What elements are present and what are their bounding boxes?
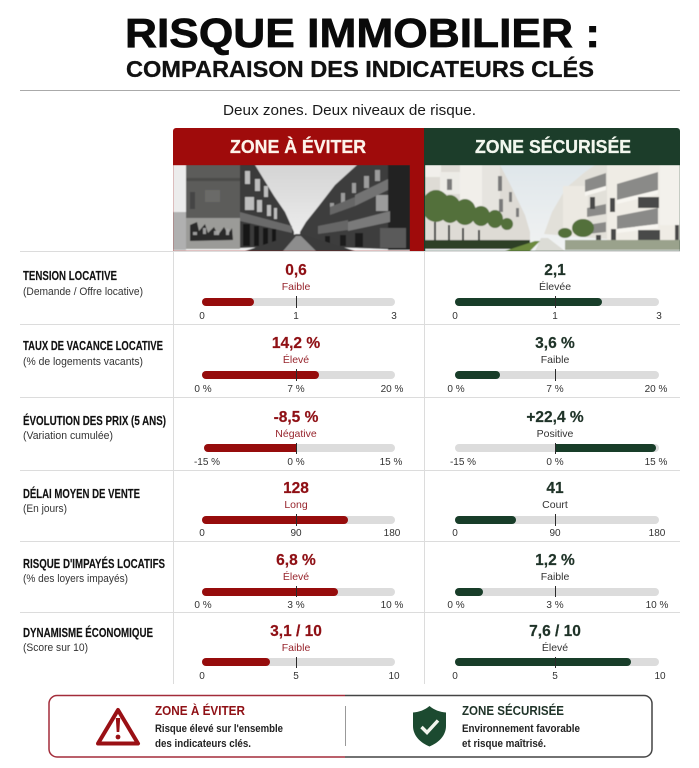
gauge: zone a eviter: 3 %: [287, 600, 305, 611]
gauge: zone securisee: 180: [649, 528, 666, 539]
gauge: zone securisee: Faible: [541, 571, 569, 583]
gauge: zone a eviter: 0 %: [287, 457, 305, 468]
row label: [23, 556, 165, 585]
gauge: zone a eviter: [199, 262, 397, 322]
gauge: zone a eviter: 128: [283, 480, 309, 497]
subtitle: Deux zones. Deux niveaux de risque.: [223, 102, 476, 119]
panel: zone securisee header: ZONE SÉCURISÉE: [475, 136, 631, 157]
row label: [23, 339, 163, 368]
gauge: zone securisee: 20 %: [645, 384, 668, 395]
gauge: zone a eviter: Faible: [282, 642, 310, 654]
gauge: zone securisee: 0: [452, 528, 458, 539]
gauge: zone securisee: 3: [656, 311, 662, 322]
gauge: zone securisee: Élevée: [539, 280, 571, 293]
row label: (Score sur 10): [23, 642, 88, 654]
gauge: zone securisee: 15 %: [645, 457, 668, 468]
row: risque d'impayes: [23, 552, 669, 611]
legend panel: [49, 696, 652, 757]
gauge: zone a eviter: 10: [388, 671, 400, 682]
gauge: zone securisee: [447, 335, 668, 395]
gauge: zone securisee: 7,6 / 10: [529, 623, 581, 640]
gauge: zone securisee: 10: [654, 671, 666, 682]
gauge: zone securisee: Court: [542, 499, 568, 511]
gauge: zone a eviter: Élevé: [283, 353, 309, 366]
row label: (% des loyers impayés): [23, 573, 128, 585]
gauge: zone a eviter: 180: [384, 528, 401, 539]
panel: zone securisee header: [422, 128, 680, 251]
gauge: zone securisee: Positive: [537, 428, 574, 440]
row label: RISQUE D'IMPAYÉS LOCATIFS: [23, 556, 165, 571]
gauge: zone a eviter: 14,2 %: [272, 335, 320, 352]
gauge: zone a eviter: 0: [199, 671, 205, 682]
row label: (% de logements vacants): [23, 356, 143, 368]
gauge: zone a eviter: 20 %: [381, 384, 404, 395]
legend text: zone a eviter: des indicateurs clés.: [155, 738, 251, 750]
row label: DÉLAI MOYEN DE VENTE: [23, 486, 140, 501]
row: evolution des prix: [23, 409, 668, 468]
gauge: zone a eviter: Long: [284, 499, 308, 511]
gauge: zone a eviter: 0 %: [194, 600, 212, 611]
gauge: zone securisee: +22,4 %: [526, 409, 584, 426]
panel: zone a eviter header: ZONE À ÉVITER: [230, 136, 366, 157]
gauge: zone securisee: 0 %: [447, 600, 465, 611]
gauge: zone securisee: 0: [452, 671, 458, 682]
gauge: zone a eviter: -15 %: [194, 457, 220, 468]
photo: modern residence: [422, 165, 680, 251]
legend text: zone securisee: [462, 703, 580, 750]
gauge: zone a eviter: 6,8 %: [276, 552, 316, 569]
row label: [23, 486, 140, 515]
legend text: zone securisee: ZONE SÉCURISÉE: [462, 703, 564, 718]
row label: DYNAMISME ÉCONOMIQUE: [23, 625, 153, 640]
gauge: zone securisee: 2,1: [544, 262, 566, 279]
row label: (Variation cumulée): [23, 430, 113, 442]
row label: [23, 625, 153, 654]
row label: [23, 413, 166, 442]
gauge: zone securisee: 1: [552, 311, 558, 322]
gauge: zone securisee: 0 %: [546, 457, 564, 468]
row: taux de vacance: [23, 335, 668, 395]
gauge: zone securisee: 0 %: [447, 384, 465, 395]
title: [125, 10, 600, 82]
legend text: zone a eviter: Risque élevé sur l'ensemble: [155, 723, 283, 735]
gauge: zone securisee: 1,2 %: [535, 552, 575, 569]
legend text: zone securisee: et risque maîtrisé.: [462, 738, 546, 750]
gauge: zone a eviter: [199, 480, 401, 539]
icon: shield check: [413, 706, 446, 746]
row label: (Demande / Offre locative): [23, 286, 143, 298]
gauge: zone securisee: 7 %: [546, 384, 564, 395]
gauge: zone a eviter: 0: [199, 528, 205, 539]
gauge: zone securisee: [447, 552, 669, 611]
gauge: zone a eviter: [194, 409, 403, 468]
gauge: zone a eviter: [194, 552, 404, 611]
gauge: zone a eviter: 0,6: [285, 262, 307, 279]
title: COMPARAISON DES INDICATEURS CLÉS: [126, 55, 594, 82]
gauge: zone securisee: [450, 409, 668, 468]
gauge: zone a eviter: 7 %: [287, 384, 305, 395]
panel: zone a eviter header: [173, 128, 424, 251]
row label: [23, 269, 143, 298]
gauge: zone securisee: -15 %: [450, 457, 476, 468]
gauge: zone a eviter: 0 %: [194, 384, 212, 395]
icon: warning triangle: [98, 710, 138, 744]
row: dynamisme economique: [23, 623, 666, 682]
gauge: zone securisee: 3 %: [546, 600, 564, 611]
row label: ÉVOLUTION DES PRIX (5 ANS): [23, 413, 166, 428]
photo: degraded street: [173, 165, 410, 251]
legend text: zone a eviter: [155, 703, 283, 750]
gauge: zone a eviter: [199, 623, 400, 682]
gauge: zone securisee: Faible: [541, 354, 569, 366]
row label: TENSION LOCATIVE: [23, 269, 117, 283]
gauge: zone a eviter: [194, 335, 404, 395]
gauge: zone securisee: [452, 480, 666, 539]
gauge: zone a eviter: Élevé: [283, 570, 309, 583]
gauge: zone a eviter: -8,5 %: [274, 409, 319, 426]
gauge: zone securisee: 5: [552, 671, 558, 682]
title: RISQUE IMMOBILIER :: [125, 10, 600, 56]
gauge: zone a eviter: 15 %: [380, 457, 403, 468]
gauge: zone securisee: 0: [452, 311, 458, 322]
gauge: zone a eviter: 90: [290, 528, 302, 539]
gauge: zone securisee: [452, 262, 662, 322]
row label: (En jours): [23, 503, 67, 515]
gauge: zone securisee: 41: [546, 480, 564, 497]
gauge: zone a eviter: 3,1 / 10: [270, 623, 322, 640]
row label: TAUX DE VACANCE LOCATIVE: [23, 339, 163, 353]
gauge: zone securisee: [452, 623, 666, 682]
gauge: zone a eviter: 0: [199, 311, 205, 322]
gauge: zone a eviter: 3: [391, 311, 397, 322]
row: tension locative: [23, 262, 662, 322]
legend text: zone securisee: Environnement favorable: [462, 723, 580, 735]
gauge: zone securisee: 3,6 %: [535, 335, 575, 352]
gauge: zone securisee: 90: [549, 528, 561, 539]
gauge: zone a eviter: 5: [293, 671, 299, 682]
gauge: zone a eviter: Faible: [282, 281, 310, 293]
row: delai moyen de vente: [23, 480, 666, 539]
legend text: zone a eviter: ZONE À ÉVITER: [155, 703, 246, 718]
gauge: zone a eviter: 1: [293, 311, 299, 322]
gauge: zone securisee: Élevé: [542, 641, 568, 654]
gauge: zone a eviter: 10 %: [381, 600, 404, 611]
gauge: zone securisee: 10 %: [646, 600, 669, 611]
gauge: zone a eviter: Négative: [275, 428, 317, 440]
